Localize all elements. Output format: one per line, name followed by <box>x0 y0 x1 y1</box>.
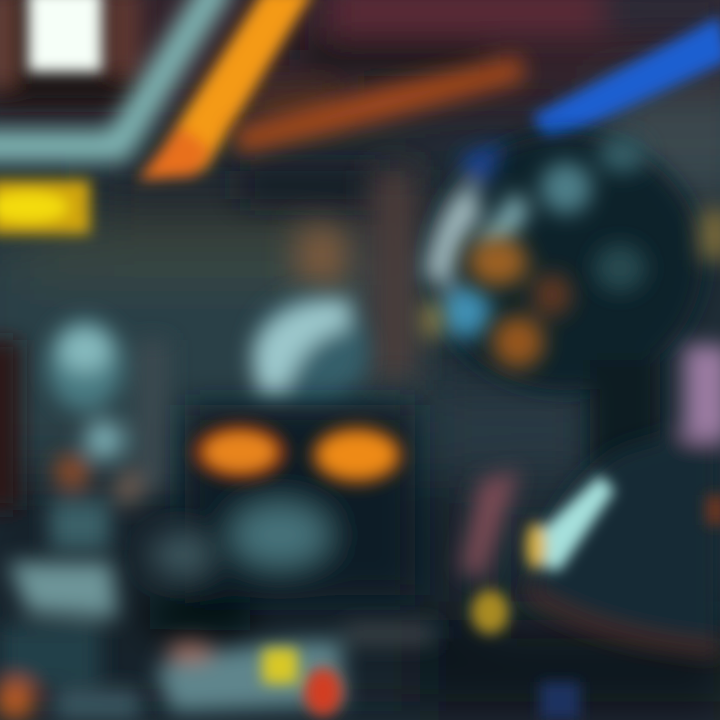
robot centre: glowing orange eyes <box>192 422 405 487</box>
ceiling light frame <box>0 0 140 105</box>
robot centre: body <box>150 405 415 630</box>
helmet orange eyes <box>423 238 572 368</box>
orange ceiling strip <box>138 0 314 180</box>
robot right: torso <box>460 210 720 650</box>
left robot lower panel <box>0 562 140 720</box>
bottom centre machine console <box>155 625 580 720</box>
helmet highlights <box>424 137 646 338</box>
ceiling dark maroon panels <box>240 0 720 200</box>
robot left: head and body <box>0 319 169 720</box>
left dark edge <box>0 340 20 510</box>
ceiling light: white panel <box>28 0 102 72</box>
robot right: helmet <box>423 134 703 470</box>
blue ceiling strip <box>532 16 720 144</box>
robot centre-back: head <box>252 294 368 406</box>
torso highlights <box>471 475 720 634</box>
console lights <box>262 648 580 720</box>
yellow wall light <box>0 180 90 234</box>
rust-orange ceiling strip <box>232 56 525 154</box>
teal ceiling strip <box>0 0 215 146</box>
brown vertical column <box>296 170 416 380</box>
